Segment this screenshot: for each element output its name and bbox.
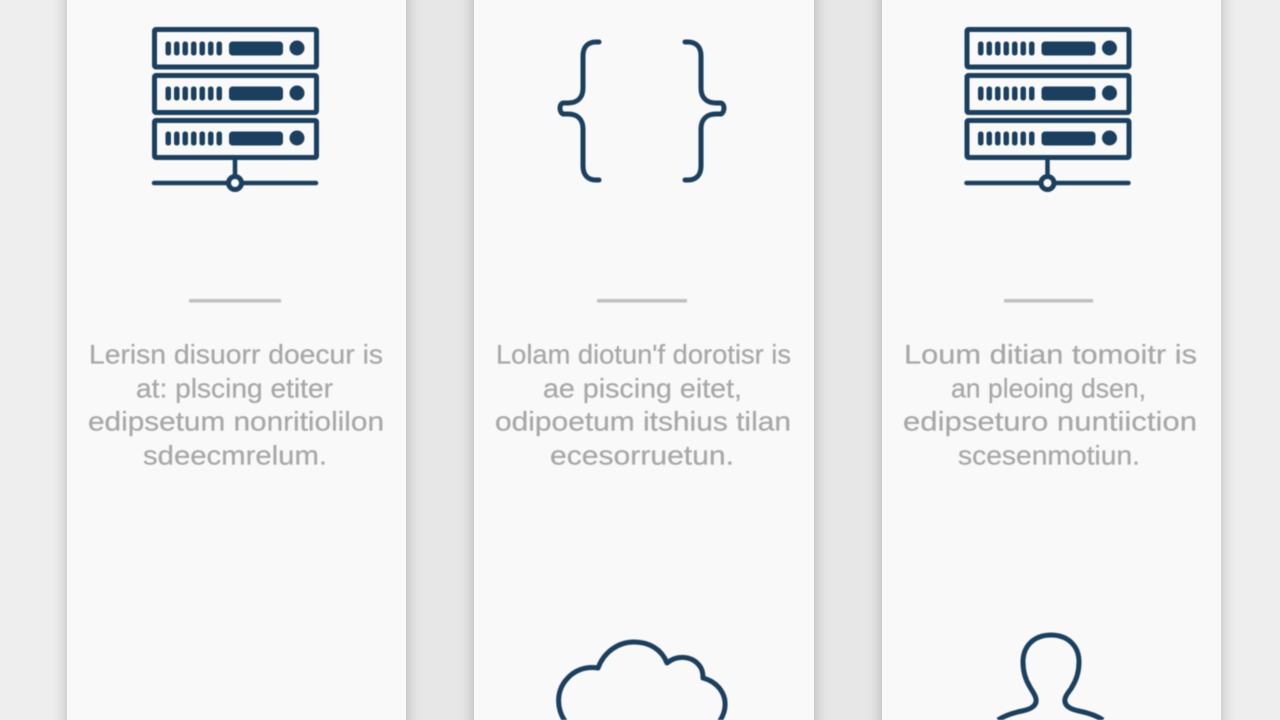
- text block: Lolam diotun'f dorotisr is: [496, 340, 791, 370]
- icon: cloud: [559, 642, 725, 720]
- text block: [903, 340, 1197, 470]
- text block: edipsetum nonritiolilon: [88, 406, 384, 436]
- text block: ae piscing eitet,: [543, 374, 742, 404]
- text block: [495, 340, 791, 470]
- icon: curly braces: [560, 42, 724, 180]
- divider: [597, 299, 687, 302]
- text block: odipoetum itshius tilan: [495, 406, 791, 436]
- text block: [88, 340, 384, 470]
- panel: right card: [882, 0, 1221, 720]
- text block: ecesorruetun.: [550, 440, 734, 470]
- panel: left card: [67, 0, 406, 720]
- divider: [189, 299, 281, 302]
- icon: person: [998, 635, 1103, 720]
- text block: scesenmotiun.: [958, 440, 1140, 470]
- icon: server rack: [154, 30, 316, 190]
- text block: Loum ditian tomoitr is: [904, 340, 1197, 370]
- icon: server rack: [966, 30, 1129, 190]
- text block: sdeecmrelum.: [143, 440, 327, 470]
- divider: [1004, 299, 1093, 302]
- panel: middle card: [474, 0, 814, 720]
- text block: Lerisn disuorr doecur is: [89, 340, 383, 370]
- text block: an pleoing dsen,: [951, 374, 1146, 404]
- text block: at: plscing etiter: [136, 374, 333, 404]
- text block: edipseturo nuntiiction: [903, 406, 1197, 436]
